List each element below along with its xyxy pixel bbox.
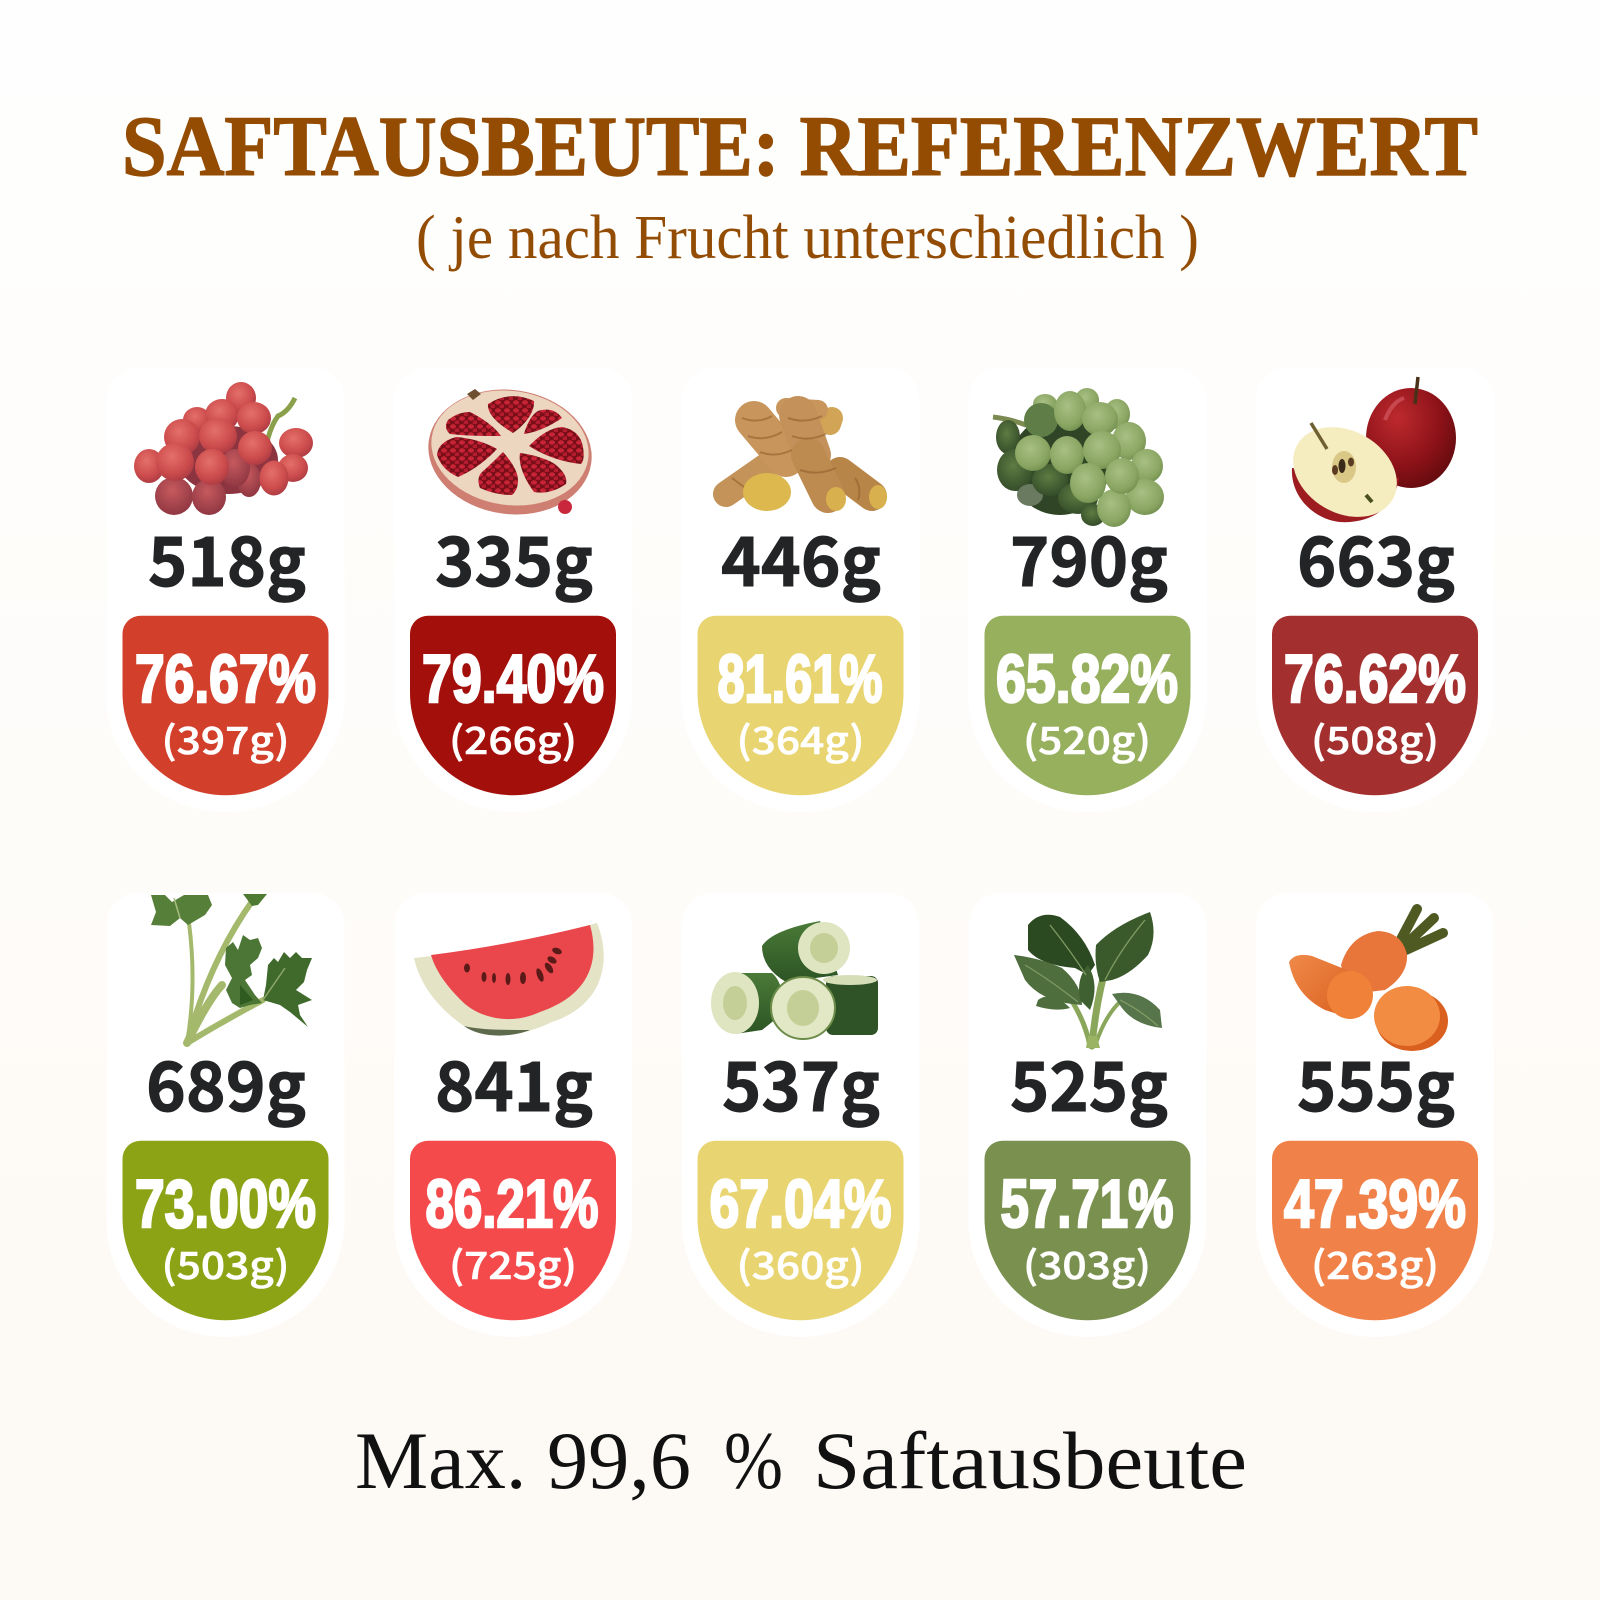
badge — [698, 616, 904, 795]
icon: celery — [151, 894, 312, 1043]
weight: 790g — [1010, 507, 1168, 606]
badge — [1272, 616, 1478, 795]
badge — [984, 1141, 1190, 1320]
badge: 86.21% — [426, 1166, 598, 1242]
panel: watermelon — [394, 893, 632, 1337]
badge — [698, 1141, 904, 1320]
icon: apple — [1277, 377, 1456, 535]
badge: (303g) — [1023, 1235, 1151, 1290]
badge — [1272, 1141, 1478, 1320]
icon: green grapes — [993, 388, 1164, 527]
title: SAFTAUSBEUTE: REFERENZWERT — [122, 98, 1478, 194]
badge: (503g) — [162, 1235, 290, 1290]
badge — [410, 616, 616, 795]
footer claim — [355, 1415, 1247, 1506]
panel: ginger — [682, 368, 920, 812]
panel: pomegranate — [394, 368, 632, 812]
panel: apple — [1256, 368, 1494, 812]
weight: 335g — [435, 507, 593, 606]
panel: carrot — [1256, 893, 1494, 1337]
panel: cucumber — [682, 893, 920, 1337]
badge: 76.62% — [1284, 641, 1466, 717]
badge: 47.39% — [1284, 1166, 1466, 1242]
weight: 518g — [148, 507, 306, 606]
badge: 67.04% — [710, 1166, 892, 1242]
badge: (725g) — [449, 1235, 577, 1290]
badge: (263g) — [1311, 1235, 1439, 1290]
icon: red grapes — [134, 382, 313, 515]
badge: (508g) — [1311, 710, 1439, 765]
weight: 525g — [1010, 1032, 1168, 1131]
badge: (360g) — [736, 1235, 864, 1290]
badge: (266g) — [449, 710, 577, 765]
badge — [984, 616, 1190, 795]
badge: (364g) — [736, 710, 864, 765]
icon: carrot — [1289, 909, 1448, 1051]
badge: 65.82% — [996, 641, 1178, 717]
badge: 57.71% — [1000, 1166, 1174, 1242]
weight: 446g — [721, 507, 881, 606]
panel: spinach — [968, 893, 1206, 1337]
panel: green grapes — [968, 368, 1206, 812]
badge — [122, 616, 328, 795]
icon: pomegranate — [420, 379, 600, 525]
icon: watermelon — [414, 923, 604, 1036]
badge: 81.61% — [718, 641, 882, 717]
icon: cucumber — [711, 921, 878, 1039]
panel: celery — [106, 893, 344, 1337]
weight: 537g — [722, 1032, 880, 1131]
icon: ginger — [726, 408, 887, 511]
weight: 689g — [146, 1032, 306, 1131]
badge: 73.00% — [135, 1166, 316, 1242]
footer claim: Saftausbeute — [813, 1415, 1247, 1506]
subtitle: ( je nach Frucht unterschiedlich ) — [416, 204, 1199, 272]
panel: red grapes — [106, 368, 344, 812]
weight: 555g — [1297, 1032, 1455, 1131]
badge: (520g) — [1023, 710, 1151, 765]
badge: 79.40% — [422, 641, 604, 717]
badge: (397g) — [162, 710, 290, 765]
footer claim: % — [724, 1415, 783, 1506]
badge — [122, 1141, 328, 1320]
footer claim: Max. 99,6 — [355, 1415, 691, 1506]
badge: 76.67% — [135, 641, 316, 717]
badge — [410, 1141, 616, 1320]
icon: spinach — [1014, 912, 1162, 1048]
weight: 663g — [1297, 507, 1455, 606]
weight: 841g — [435, 1032, 593, 1131]
